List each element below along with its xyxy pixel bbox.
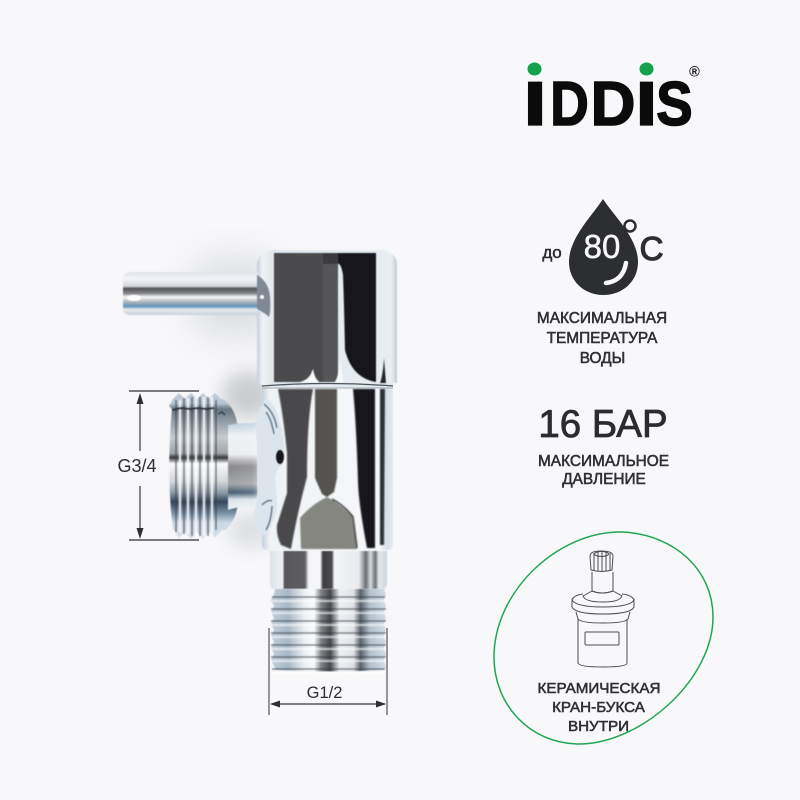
registered mark: ® xyxy=(689,65,700,81)
handle xyxy=(123,272,258,315)
text: max pressure xyxy=(538,453,669,488)
left dark reflection xyxy=(277,389,313,549)
logo: IDDIS: I xyxy=(635,70,658,139)
text: ceramic cartridge inside xyxy=(538,680,660,735)
side flange xyxy=(254,399,284,535)
text: max pressure: ДАВЛЕНИЕ xyxy=(562,471,646,488)
handle base glare xyxy=(260,295,264,299)
centre stripe xyxy=(315,389,337,497)
neck xyxy=(228,409,272,525)
heading: 16 bar: 16 БАР xyxy=(538,403,668,446)
handle tip glare xyxy=(127,295,141,301)
logo: IDDIS: I xyxy=(523,69,547,138)
cap grey face xyxy=(274,253,323,382)
black stripe xyxy=(353,389,375,548)
text: ceramic cartridge inside: КЕРАМИЧЕСКАЯ xyxy=(538,680,660,697)
dimension: G3/4 xyxy=(117,391,199,540)
text: ceramic cartridge inside: КРАН-БУКСА xyxy=(552,699,646,716)
icon: temperature drop xyxy=(542,199,663,295)
bottom highlight xyxy=(300,369,319,382)
drop xyxy=(569,199,638,295)
valve photo xyxy=(123,250,397,673)
valve drop shadow xyxy=(195,262,275,548)
cap reflections xyxy=(274,253,386,383)
bottom thread xyxy=(271,589,386,673)
cap seam xyxy=(262,382,393,388)
icon: ceramic cartridge xyxy=(572,551,634,667)
logo: IDDIS: D xyxy=(550,70,589,139)
C unit: C xyxy=(640,230,663,267)
lower collar xyxy=(270,551,387,589)
logo: IDDIS: S xyxy=(656,70,693,139)
dimension: G3/4: G3/4 xyxy=(117,456,157,476)
thin stripe xyxy=(380,389,385,545)
green outline xyxy=(494,532,713,744)
handle base xyxy=(257,275,270,317)
right spike xyxy=(380,358,386,383)
dimension: G1/2 xyxy=(269,628,387,715)
text: max pressure: МАКСИМАЛЬНОЕ xyxy=(538,453,669,470)
text: max temperature xyxy=(537,310,667,367)
body reflections xyxy=(277,389,385,549)
text: max temperature: ТЕМПЕРАТУРА xyxy=(547,330,658,347)
flange dark spot xyxy=(276,450,284,464)
text: max temperature: ВОДЫ xyxy=(580,350,625,367)
seam line xyxy=(262,384,393,386)
text: ceramic cartridge inside: ВНУТРИ xyxy=(568,718,629,735)
degree ring xyxy=(624,220,636,232)
prefix: до xyxy=(542,243,562,262)
dimension: G1/2: G1/2 xyxy=(307,684,342,702)
logo: IDDIS xyxy=(523,62,700,139)
logo: IDDIS: D xyxy=(591,70,635,139)
lower body xyxy=(262,388,393,550)
cap xyxy=(257,250,397,385)
drop highlight xyxy=(606,263,626,283)
logo dots xyxy=(528,62,654,76)
cap black face xyxy=(323,253,376,382)
lower window xyxy=(300,497,357,549)
text: max temperature: МАКСИМАЛЬНАЯ xyxy=(537,310,667,327)
80 value: 80 xyxy=(584,228,620,265)
side threaded outlet xyxy=(169,393,238,539)
